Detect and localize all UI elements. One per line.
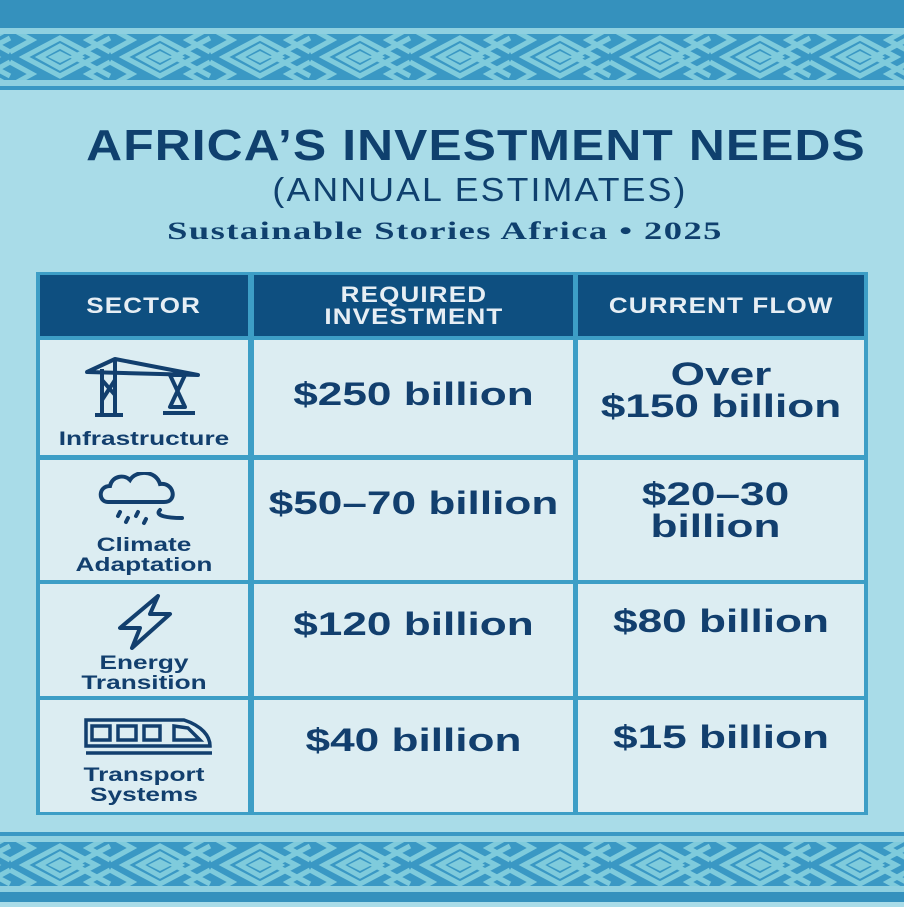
- label: energy transition: Energy: [100, 653, 188, 674]
- label: energy transition: Transition: [81, 673, 207, 694]
- icon: lightning: [118, 594, 172, 650]
- label: climate adaptation: Adaptation: [76, 555, 212, 576]
- header: required investment: [254, 275, 573, 336]
- text: billion: [650, 508, 780, 544]
- credit line: Sustainable Stories Africa • 2025: [167, 218, 723, 245]
- header: sector: [40, 275, 248, 336]
- header: current flow: [578, 275, 864, 336]
- values: infrastructure: $250 billion: [293, 376, 534, 412]
- label: transport systems: Systems: [90, 785, 198, 806]
- text: Over: [671, 356, 771, 392]
- label: transport systems: Transport: [84, 765, 204, 786]
- bottom border band: [0, 832, 904, 902]
- values: transport: $40 billion: [306, 722, 521, 758]
- top border band: [0, 0, 904, 90]
- header: sector: SECTOR: [87, 292, 201, 318]
- label: energy transition: [81, 653, 207, 694]
- icon: crane: [85, 357, 200, 417]
- header: required investment: REQUIRED: [340, 282, 487, 306]
- text: $80 billion: [613, 603, 829, 639]
- label: climate adaptation: [76, 535, 212, 576]
- label: climate adaptation: Climate: [97, 535, 191, 556]
- subtitle: (ANNUAL ESTIMATES): [272, 171, 688, 208]
- icon: train: [84, 718, 212, 755]
- values: climate: $50–70 billion: [269, 485, 558, 521]
- title: AFRICA’S INVESTMENT NEEDS: [86, 121, 866, 170]
- values: energy: $120 billion: [293, 606, 534, 642]
- label: transport systems: [84, 765, 204, 806]
- header: current flow: CURRENT FLOW: [609, 292, 833, 318]
- text: $20–30: [642, 476, 789, 512]
- icon: cloud rain: [98, 472, 184, 526]
- table: [36, 272, 868, 815]
- label: infrastructure: Infrastructure: [59, 429, 229, 450]
- header: required investment: INVESTMENT: [324, 304, 503, 328]
- text: $15 billion: [613, 719, 829, 755]
- text: $150 billion: [601, 388, 841, 424]
